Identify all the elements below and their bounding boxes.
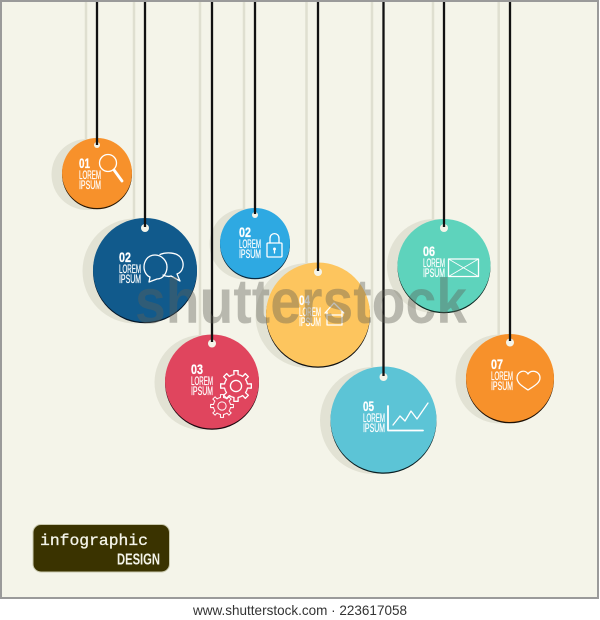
cord shadows — [86, 2, 499, 380]
tag 01: search: 01 — [79, 156, 90, 171]
tag 04: home — [256, 2, 370, 368]
tag 01: search — [52, 2, 132, 210]
tag 06: mail — [387, 2, 490, 313]
tag 04: home: 04 — [299, 293, 310, 308]
badge: infographic design: DESIGN — [117, 552, 160, 568]
icon: padlock — [267, 234, 282, 257]
tag 06: mail: 06 — [423, 244, 435, 259]
tag 01: search: IPSUM — [79, 180, 101, 192]
tag 02: lock: IPSUM — [239, 249, 261, 261]
tag 05: chart — [320, 2, 436, 474]
watermark: shutterstock — [135, 267, 468, 337]
tag 04: home: LOREM — [299, 307, 321, 319]
footer credit: www.shutterstock.com · 223617058 — [192, 602, 407, 618]
tag 02: lock: LOREM — [239, 239, 261, 251]
tag 01: search: LOREM — [79, 170, 101, 182]
tag 07: heart: LOREM — [491, 371, 513, 383]
badge: infographic design: infographic — [40, 532, 148, 550]
tag 05: chart: 05 — [363, 399, 374, 414]
tag 03: gears — [154, 2, 259, 430]
tag 02: lock: 02 — [239, 225, 251, 240]
tag 02: chat: LOREM — [119, 264, 141, 276]
tag 02: chat — [82, 2, 197, 324]
icon: house — [325, 303, 344, 325]
tag 06: mail: IPSUM — [423, 268, 445, 280]
icon: magnifier — [100, 154, 122, 181]
icon: line chart — [388, 403, 428, 430]
tag 02: chat: IPSUM — [119, 274, 141, 286]
tag 07: heart — [456, 2, 554, 424]
tag 05: chart: IPSUM — [363, 423, 385, 435]
tag 04: home: IPSUM — [299, 317, 321, 329]
tag 02: chat: 02 — [119, 250, 131, 265]
tag 03: gears: IPSUM — [191, 386, 213, 398]
badge: infographic design — [33, 524, 170, 572]
tag 07: heart: 07 — [491, 357, 503, 372]
tag 03: gears: 03 — [191, 362, 203, 377]
tag 05: chart: LOREM — [363, 413, 385, 425]
icon: heart — [517, 371, 540, 390]
tag 03: gears: LOREM — [191, 376, 213, 388]
icon: speech bubbles — [144, 253, 183, 282]
tag 06: mail: LOREM — [423, 258, 445, 270]
tag 07: heart: IPSUM — [491, 381, 513, 393]
icon: gears — [211, 371, 251, 417]
tag 02: lock — [210, 2, 290, 280]
icon: envelope — [448, 259, 478, 276]
